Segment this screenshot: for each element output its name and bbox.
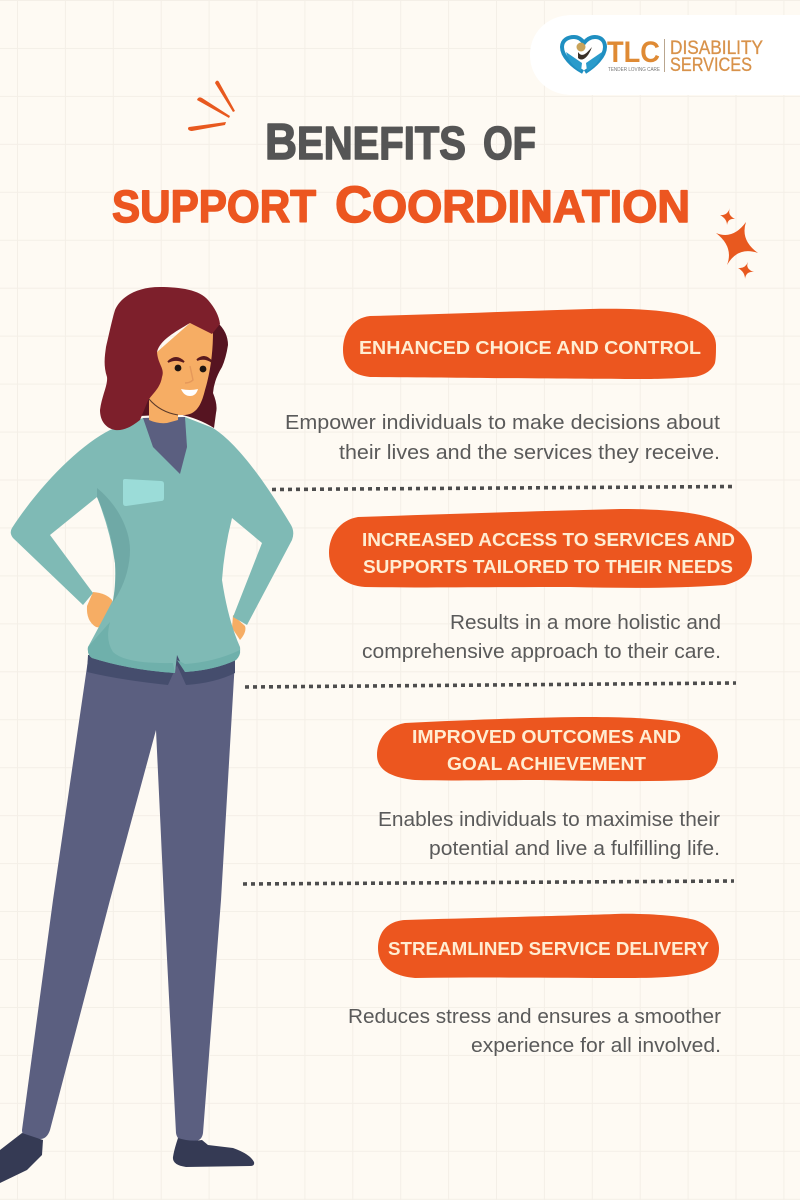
logo text: disability services: SERVICES	[670, 55, 752, 76]
decorative stars	[716, 208, 758, 279]
logo panel	[530, 15, 800, 95]
description: their lives and the services they receive.	[339, 442, 720, 464]
pill: enhanced choice and control	[343, 309, 716, 379]
face	[150, 323, 213, 415]
pill: streamlined service delivery	[378, 914, 719, 978]
pill label: INCREASED ACCESS TO SERVICES AND	[362, 529, 735, 550]
description	[348, 1006, 721, 1057]
benefit 2	[329, 509, 752, 663]
pill: improved outcomes	[377, 717, 718, 781]
waistband	[87, 655, 235, 685]
hair front	[100, 287, 220, 430]
benefit 3	[377, 717, 720, 860]
description	[378, 809, 720, 860]
logo divider	[664, 39, 665, 72]
title line 2	[112, 176, 690, 233]
description: potential and live a fulfilling life.	[429, 838, 720, 860]
title line 1: OF	[483, 117, 536, 169]
mouth	[181, 389, 198, 396]
logo wordmark TLC: TLC	[607, 36, 660, 69]
title line 2: COORDINATION	[335, 176, 690, 233]
hand right	[232, 615, 245, 640]
description: Enables individuals to maximise their	[378, 809, 720, 831]
eyes	[175, 365, 206, 372]
nose	[185, 366, 193, 383]
logo text: disability services	[670, 38, 763, 76]
name badge	[123, 479, 164, 506]
pill label: IMPROVED OUTCOMES AND	[412, 726, 681, 747]
logo tagline: TENDER LOVING CARE	[608, 67, 661, 73]
description	[362, 612, 721, 663]
benefit 1	[285, 309, 720, 464]
jacket hem shadow	[88, 622, 175, 673]
icon: heart with hands	[562, 37, 605, 72]
neck	[149, 396, 178, 423]
logo text: disability services: DISABILITY	[670, 38, 763, 59]
eyebrows	[168, 357, 212, 362]
illustration: woman standing	[0, 287, 293, 1183]
description: experience for all involved.	[471, 1035, 721, 1057]
title line 1: BENEFITS	[265, 113, 466, 170]
jacket side shadow	[97, 488, 130, 602]
description: comprehensive approach to their care.	[362, 641, 721, 663]
pill label: GOAL ACHIEVEMENT	[447, 753, 647, 774]
description: Empower individuals to make decisions about	[285, 412, 720, 434]
description	[285, 412, 720, 464]
pill label: STREAMLINED SERVICE DELIVERY	[388, 938, 710, 959]
pill label: ENHANCED CHOICE AND CONTROL	[359, 337, 701, 358]
pill: increased access	[329, 509, 752, 588]
pill label	[362, 529, 735, 577]
jaw line	[149, 399, 178, 415]
pill label: SUPPORTS TAILORED TO THEIR NEEDS	[363, 556, 733, 577]
description: Results in a more holistic and	[450, 612, 721, 634]
shoe left	[0, 1133, 43, 1183]
hand left	[87, 592, 113, 627]
decorative rays	[188, 81, 235, 131]
benefit 4	[348, 914, 721, 1057]
description: Reduces stress and ensures a smoother	[348, 1006, 721, 1028]
title	[112, 113, 690, 233]
hair back	[140, 322, 228, 428]
pill label	[412, 726, 681, 774]
title line 2: SUPPORT	[112, 181, 316, 232]
shoe right	[173, 1138, 254, 1167]
jacket	[11, 417, 293, 673]
undershirt	[143, 417, 187, 474]
trousers	[22, 660, 235, 1141]
